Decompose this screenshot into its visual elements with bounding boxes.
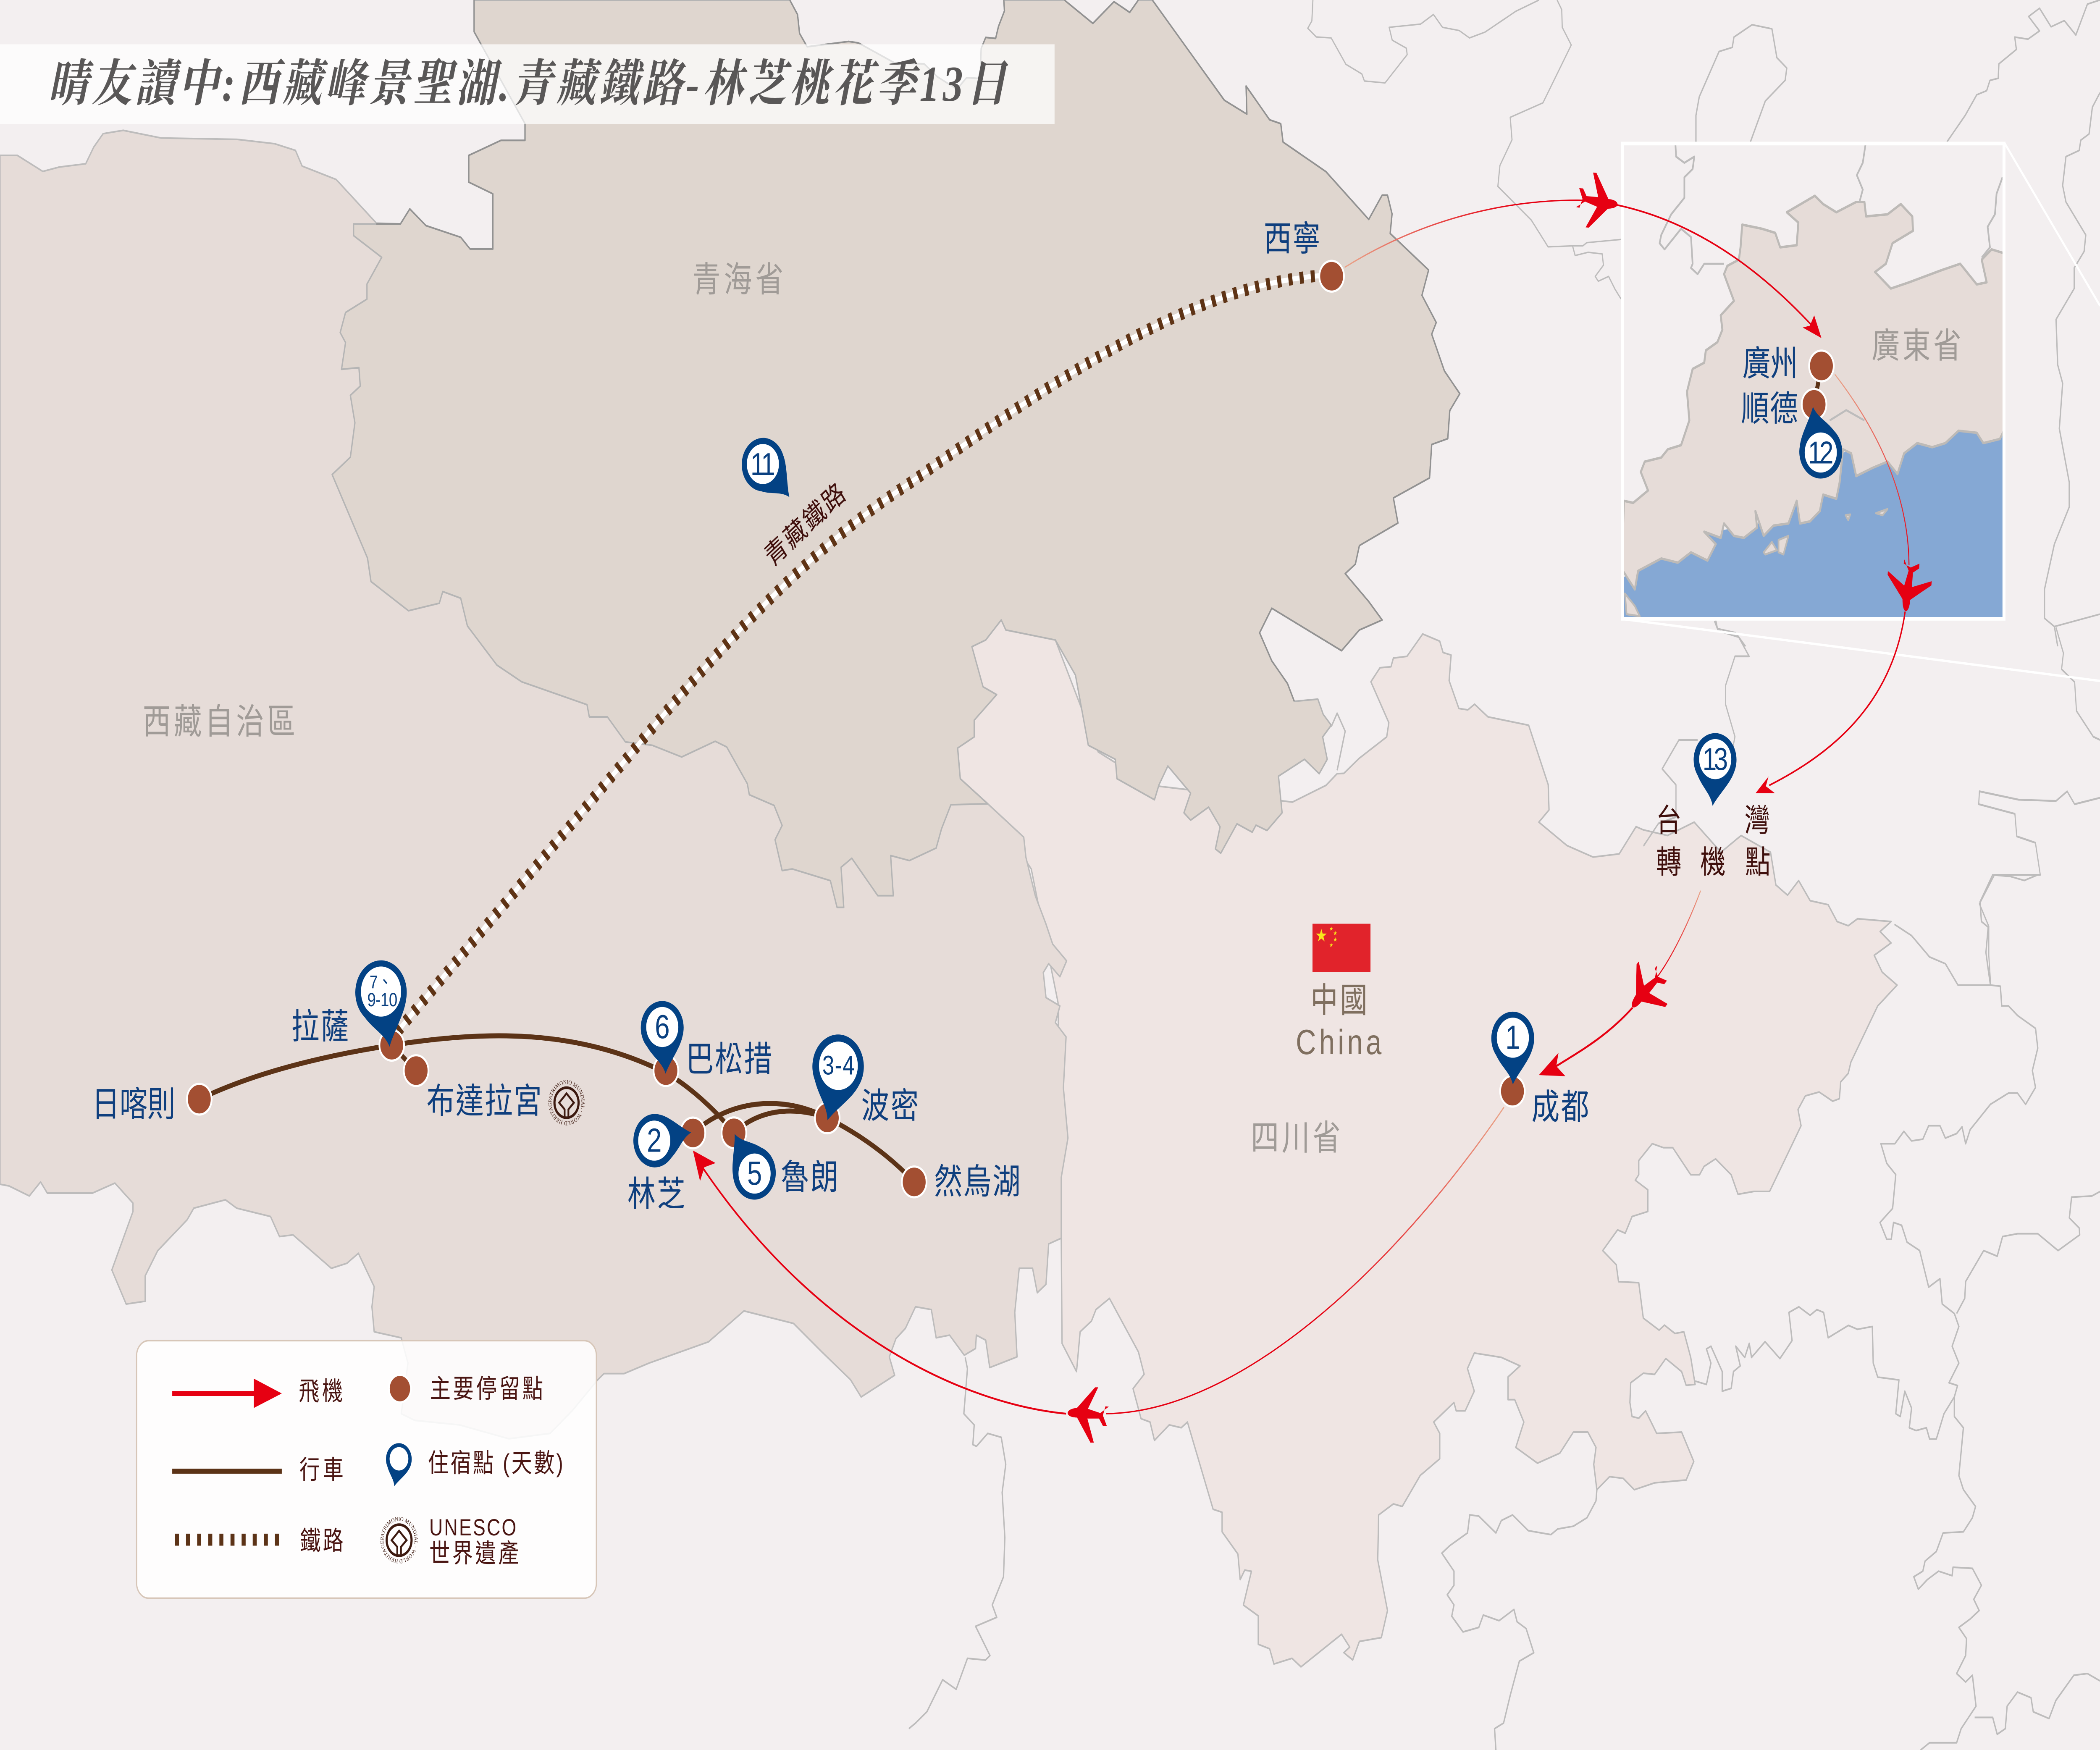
pin: day 2: [630, 1106, 695, 1172]
province label: Sichuan: 四川省: [1251, 1118, 1341, 1158]
legend: road line: [172, 1471, 282, 1472]
label: Rawu Lake: 然烏湖: [934, 1162, 1021, 1202]
legend: road label: 行車: [299, 1455, 344, 1484]
legend: UNESCO label: UNESCO: [429, 1514, 516, 1540]
legend: UNESCO mark: PATRIMONIO MUNDIAL · WORLD HERITAGE · PATRIMOINE MONDIAL: [379, 1516, 419, 1565]
pin: day 11: 11: [751, 446, 775, 482]
label: Basum Tso: 巴松措: [686, 1040, 772, 1079]
label: Taiwan transfer: 台: [1656, 803, 1682, 838]
pin: day 6: [639, 999, 687, 1076]
province label: Tibet: 西藏自治區: [143, 702, 295, 742]
map: neighbouring boundaries south and west: [909, 1357, 1006, 1729]
label: Taiwan transfer: 機: [1700, 845, 1726, 880]
pin: day 12: 12: [1808, 435, 1833, 470]
inset: neighbouring boundaries: [1659, 145, 2003, 420]
pin: day 5: 5: [747, 1155, 762, 1192]
province: Tibet: [0, 130, 1068, 1439]
map: neighbouring boundaries north: [1308, 0, 1621, 299]
icon: UNESCO heritage mark at Potala: PATRIMONIO MUNDIAL · WORLD HERITAGE · PATRIMOINE MONDIAL: [547, 1079, 585, 1127]
label: Xining: 西寧: [1264, 219, 1320, 259]
pin: day 6: 6: [655, 1008, 670, 1046]
icon: China flag: [1312, 924, 1370, 972]
label: Lhasa: 拉薩: [291, 1007, 349, 1047]
pin: day 1: [1491, 1012, 1534, 1084]
pin: days 7 and 9-10: 9-10: [368, 989, 397, 1010]
pin: days 3-4: 3-4: [822, 1051, 854, 1081]
pin: day 13: [1691, 731, 1738, 808]
label: Bomi: 波密: [861, 1086, 919, 1126]
label: Potala Palace: 布達拉宮: [427, 1081, 542, 1121]
stops: [187, 261, 1834, 1197]
legend: flight arrow: [172, 1379, 282, 1408]
province: Qinghai: [332, 0, 1460, 908]
railway: Qinghai-Tibet: [398, 276, 1319, 1031]
flight: Guangzhou to Taiwan: [1756, 374, 1909, 793]
province label: Guangdong: 廣東省: [1872, 326, 1961, 366]
title bar: [0, 44, 1055, 124]
legend: stop marker: [389, 1375, 411, 1402]
label: Chengdu: 成都: [1531, 1088, 1589, 1127]
inset connector lines: [1623, 144, 2100, 681]
legend: flight label: 飛機: [299, 1377, 343, 1406]
inset: islands: [1625, 509, 1887, 616]
inset: white frame: [1622, 144, 2004, 619]
inset: sea: [1624, 425, 2003, 617]
pin: day 5: [717, 1120, 784, 1210]
label: Shigatse: 日喀則: [92, 1085, 176, 1124]
flight: Taiwan to Chengdu: [1539, 891, 1701, 1076]
map: neighbouring boundary near Sichuan bay: [1331, 713, 1345, 770]
roads: [199, 366, 1822, 1182]
map: darker Qinghai outer boundary: [376, 0, 1460, 701]
legend: pin label: 住宿點 (天數): [428, 1448, 563, 1477]
pin: day 11: [733, 427, 804, 516]
label: Taiwan transfer: 灣: [1744, 803, 1770, 838]
pin: days 7 and 9-10: 7、: [370, 972, 392, 993]
label: Taiwan transfer: 轉: [1656, 845, 1682, 880]
pin: days 7 and 9-10: [351, 955, 415, 1053]
label: Taiwan transfer: [1656, 803, 1771, 880]
province: Sichuan: [958, 620, 1897, 1667]
map: neighbouring boundaries east: [1643, 621, 2100, 984]
icon: plane 1: [1575, 171, 1619, 230]
legend panel: [136, 1341, 596, 1598]
flight: Xining to Guangzhou: [1345, 200, 1822, 338]
label: Taiwan transfer: 點: [1745, 845, 1771, 880]
inset: Guangdong map: [1622, 144, 2005, 619]
title: 晴友讀中:西藏峰景聖湖.青藏鐵路-林芝桃花季13日: [48, 57, 1008, 112]
flight: Chengdu to Nyingchi: [693, 1107, 1504, 1414]
icon: plane 2: [1885, 558, 1933, 614]
label: China in English: China: [1296, 1023, 1382, 1062]
map: neighbouring boundaries south-east: [1442, 875, 2100, 1750]
label: Lulang: 魯朗: [781, 1158, 838, 1197]
pin: day 1: 1: [1505, 1019, 1520, 1056]
map: neighbouring boundaries north-east: [1696, 0, 2100, 646]
label: Qinghai-Tibet railway: 青藏鐵路: [760, 477, 850, 572]
legend: railway line: [175, 1538, 280, 1541]
pin: days 3-4: [803, 1028, 869, 1128]
province label: Qinghai: 青海省: [693, 260, 783, 299]
label: Guangzhou: 廣州: [1743, 344, 1798, 383]
legend: pin marker: [382, 1440, 414, 1490]
label: China in Chinese: 中國: [1310, 981, 1368, 1020]
legend: world heritage label: 世界遺產: [429, 1539, 519, 1568]
legend: railway label: 鐵路: [300, 1526, 344, 1555]
inset: Guangdong province: [1622, 196, 2005, 590]
icon: plane 4: [1068, 1387, 1109, 1443]
legend: stop label: 主要停留點: [430, 1374, 543, 1403]
pin: day 12: [1792, 401, 1846, 483]
pin: day 2: 2: [647, 1122, 662, 1159]
pin: day 13: 13: [1703, 741, 1728, 777]
label: Shunde: 順德: [1741, 389, 1798, 429]
icon: plane 3: [1617, 952, 1678, 1028]
label: Nyingchi: 林芝: [627, 1175, 685, 1214]
